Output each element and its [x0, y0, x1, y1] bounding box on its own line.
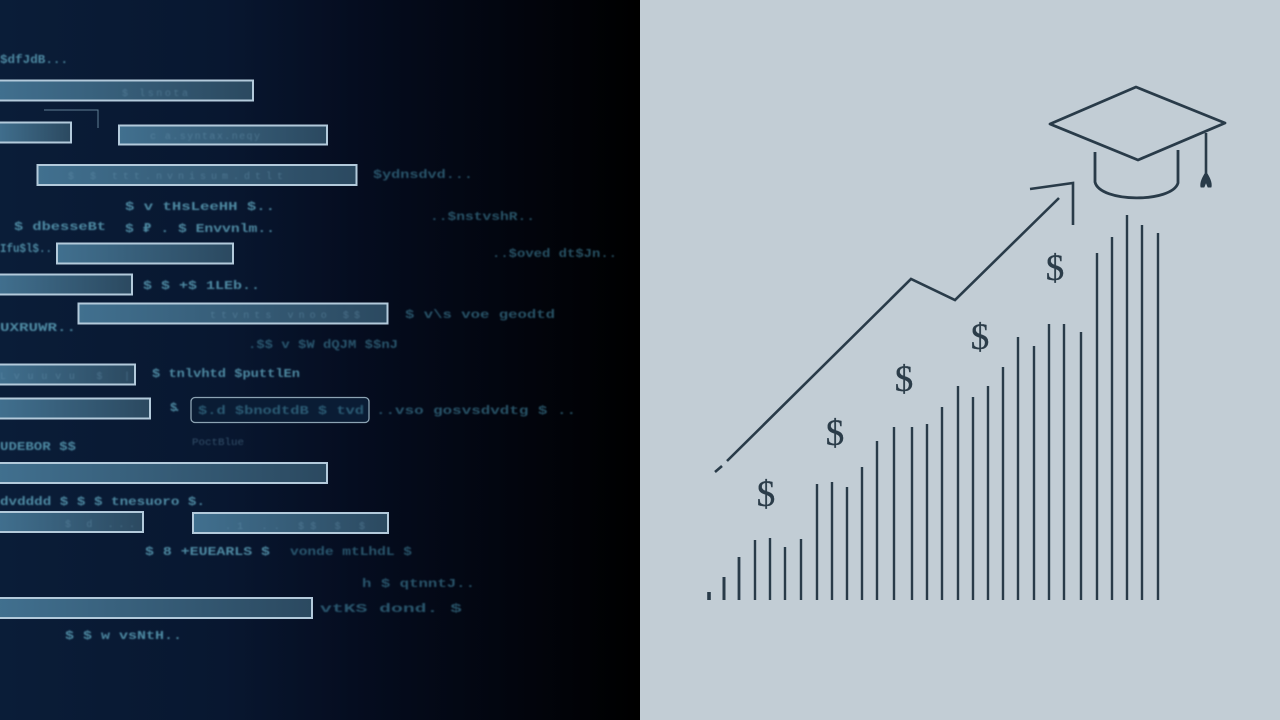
code text: blurred code lines: $ 8 +EUEARLS $: [145, 545, 270, 559]
bar chart: rising thin bars: [709, 215, 1158, 600]
code text: blurred code lines: ..vso gosvsdvdtg $ ..: [376, 404, 576, 418]
code text: blurred code lines: ..$nstvshR..: [430, 210, 535, 224]
panel: dark code background: [0, 0, 640, 720]
code text: blurred code lines: Ifu$l$..: [0, 242, 52, 256]
code text: blurred code lines: .$$ v $W dQJM $$nJ: [248, 338, 398, 352]
dollar signs: [757, 248, 1064, 515]
code text: blurred code lines: [0, 53, 617, 643]
code blocks: outlined bars: [0, 80, 388, 618]
code text: blurred code lines: $ $ +$ 1LEb..: [143, 279, 260, 293]
code text: blurred code lines: ..$oved dt$Jn..: [492, 247, 617, 261]
code text: blurred code lines: vtKS dond. $: [320, 602, 462, 616]
code text: blurred code lines: $ ₽ . $ Envvnlm..: [125, 222, 275, 236]
dollar signs: $: [757, 474, 775, 515]
code text: blurred code lines: h $ qtnntJ..: [362, 577, 475, 591]
dollar signs: $: [1046, 248, 1064, 289]
code text: blurred code lines: $ lsnota: [122, 88, 188, 100]
code text: blurred code lines: UXRUWR..: [0, 321, 76, 335]
code text: blurred code lines: $ $ w vsNtH..: [65, 629, 182, 643]
trend arrow: rising line with head: [715, 183, 1073, 472]
code text: blurred code lines: c a.syntax.neqy: [150, 132, 260, 143]
code text: blurred code lines: dvdddd $ $ $ tnesuoro $.: [0, 495, 205, 509]
code text: blurred code lines: Lvuuvu $ |: [0, 371, 130, 383]
dollar signs: $: [895, 359, 913, 400]
dollar signs: $: [826, 413, 844, 454]
code text: blurred code lines: UDEBOR $$: [0, 440, 76, 454]
panel: light chart background: [640, 0, 1280, 720]
code text: blurred code lines: $ tnlvhtd $puttlEn: [152, 367, 300, 381]
code text: blurred code lines: $dfJdB...: [0, 53, 68, 67]
code text: blurred code lines: $.: [170, 401, 181, 415]
code text: blurred code lines: ttvnts vnoo $$: [210, 310, 360, 322]
code text: blurred code lines: vonde mtLhdL $: [290, 545, 412, 559]
code connector line: [44, 110, 98, 128]
code text: blurred code lines: $.d $bnodtdB $ tvd: [198, 404, 364, 418]
icon: graduation cap: [1050, 87, 1225, 198]
code text: blurred code lines: $ $ ttt.nvnisum.dtlt: [68, 171, 283, 183]
code callout: rounded outline: [191, 398, 369, 422]
code text: blurred code lines: $ v tHsLeeHH $..: [125, 200, 275, 214]
code text: blurred code lines: $ydnsdvd...: [373, 168, 473, 182]
code text: blurred code lines: PoctBlue: [192, 437, 244, 449]
code text: blurred code lines: $ d ...: [65, 519, 135, 531]
code text: blurred code lines: $ v\s voe geodtd: [405, 308, 555, 322]
code text: blurred code lines: .1 .. $$ $ $: [225, 521, 365, 533]
code text: blurred code lines: $ dbesseBt: [14, 220, 106, 234]
dollar signs: $: [971, 317, 989, 358]
